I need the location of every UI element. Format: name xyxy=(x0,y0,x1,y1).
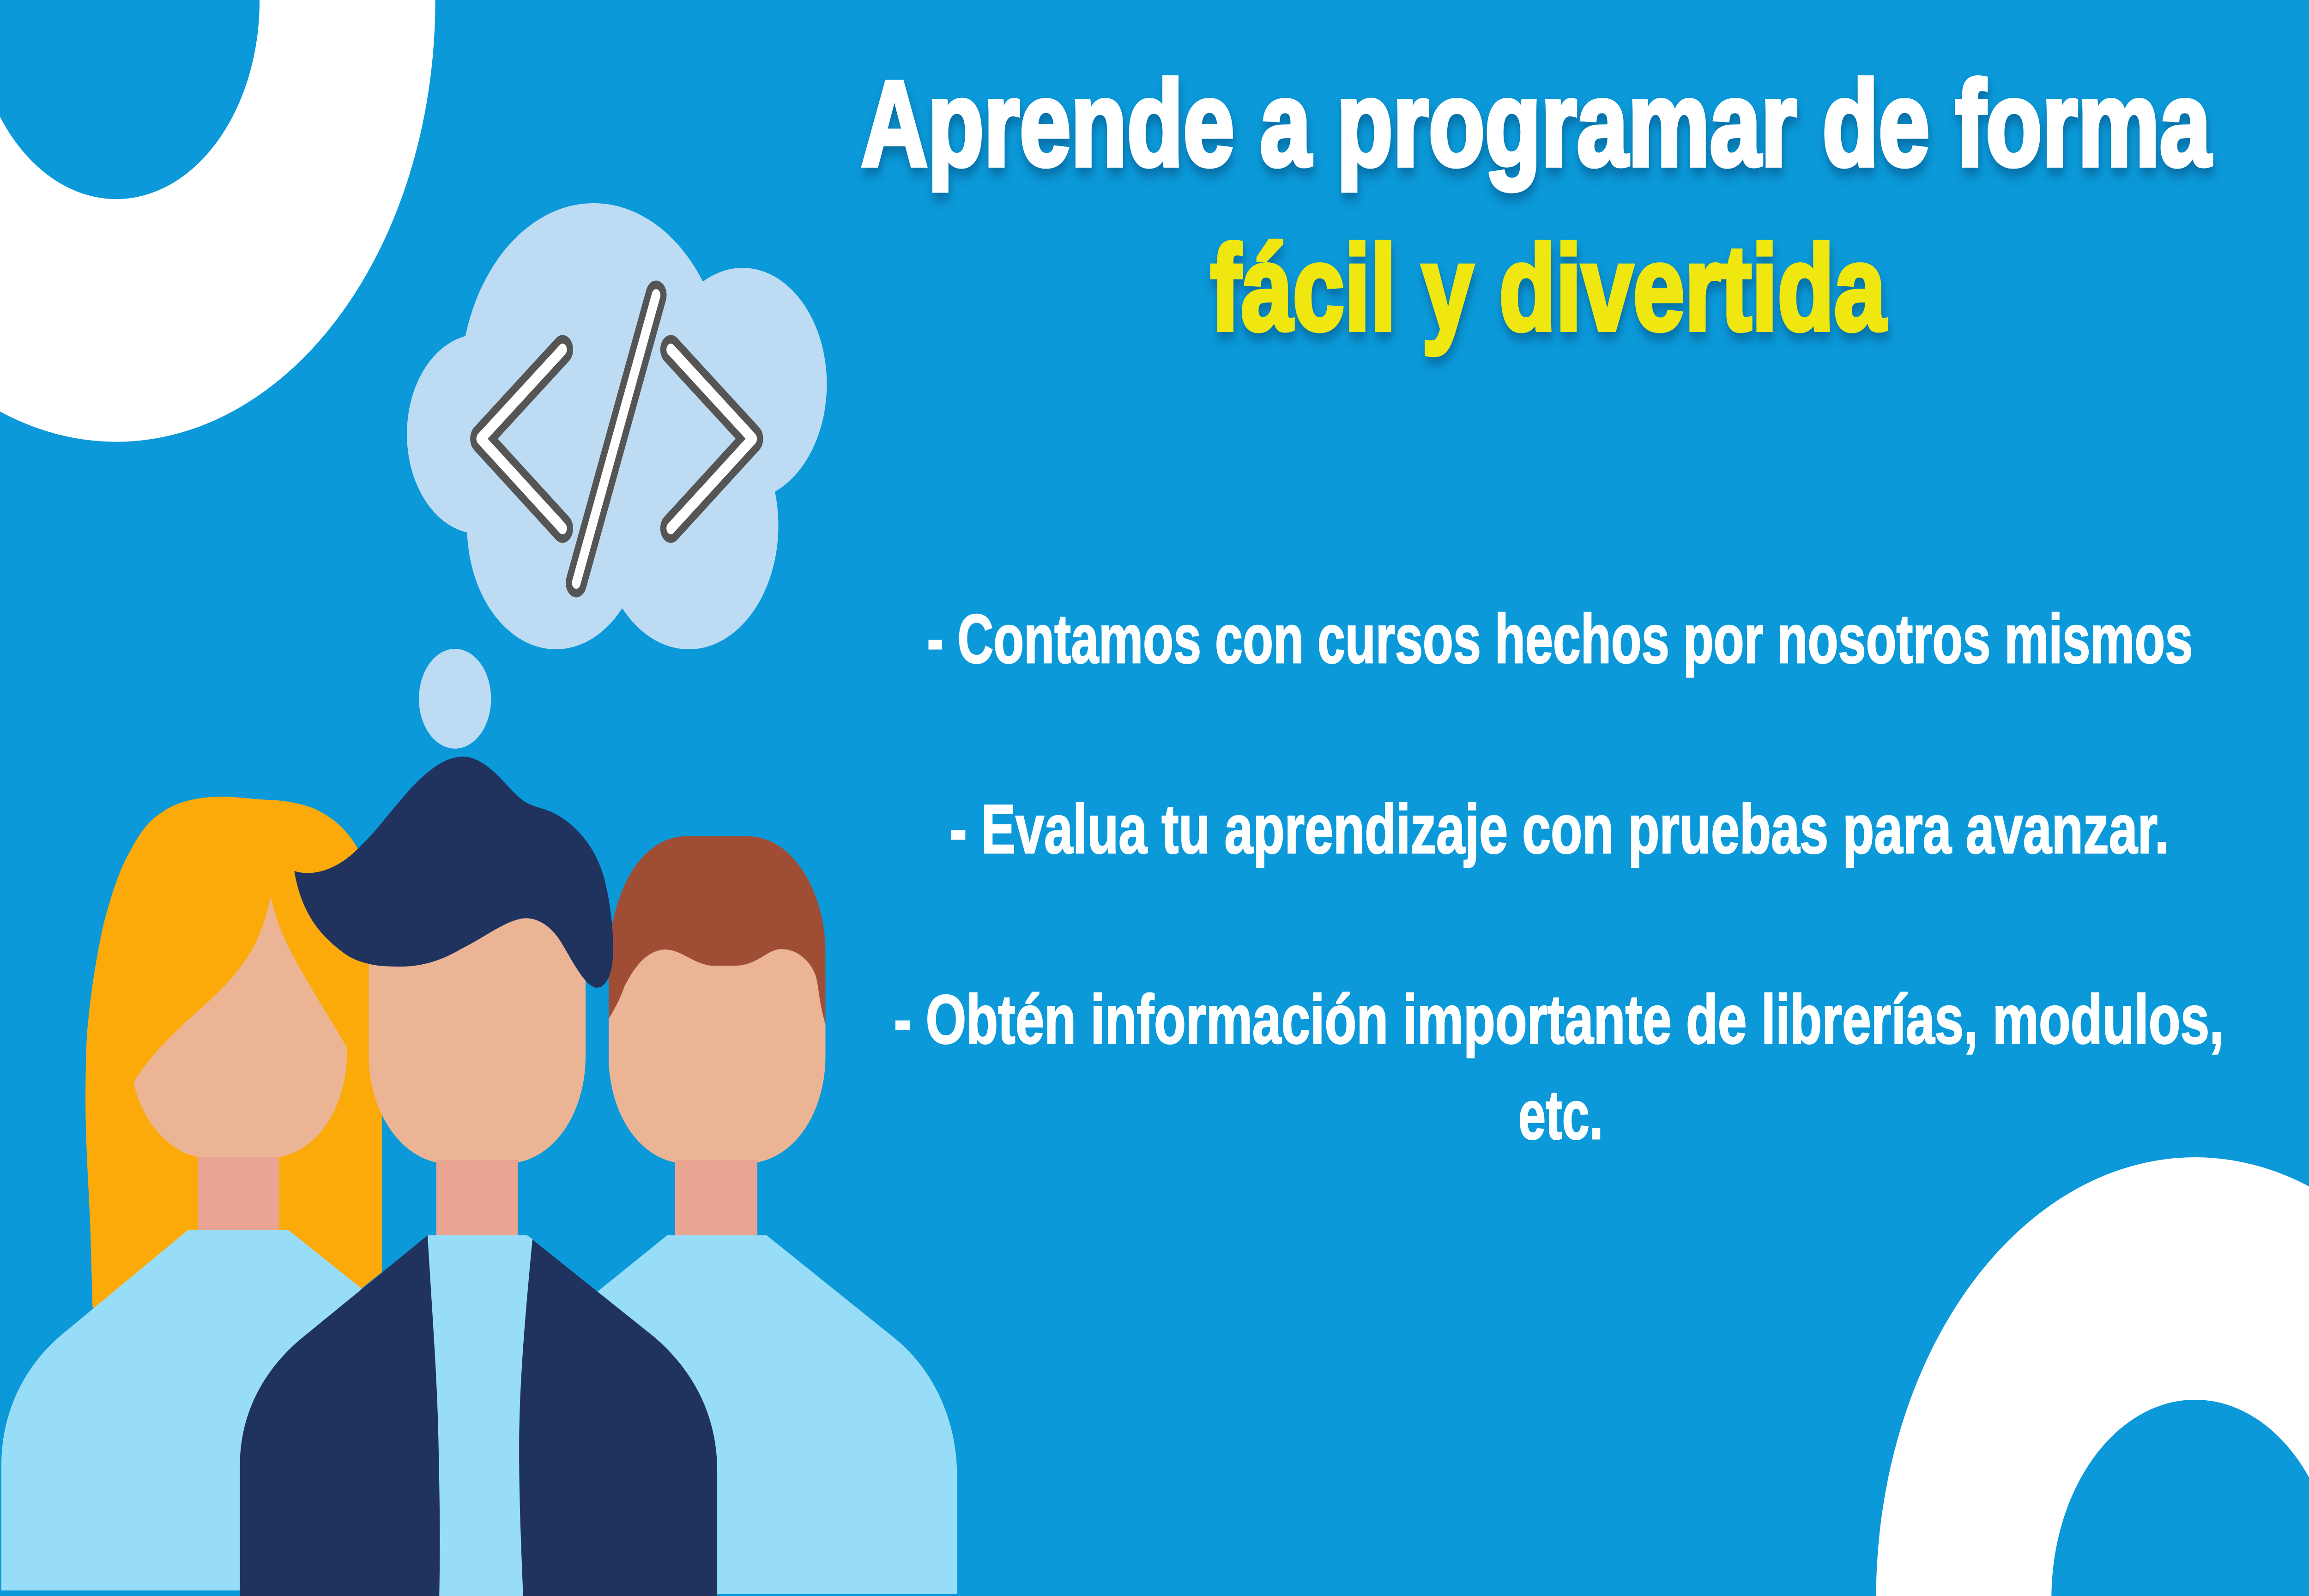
benefit 2: - Evalua tu aprendizaje con pruebas para avanzar. xyxy=(950,790,2169,868)
benefit 3 line 1: - Obtén información importante de librerías, modulos, xyxy=(894,980,2224,1058)
woman hair xyxy=(85,797,382,1339)
right man hair xyxy=(609,836,825,1024)
middle man jacket xyxy=(240,1235,717,1596)
small bubble xyxy=(419,649,491,749)
middle man face xyxy=(369,901,586,1162)
right man shirt xyxy=(501,1235,957,1594)
thought bubble xyxy=(407,203,827,749)
right man face xyxy=(609,942,825,1162)
decorative ring: bottom right xyxy=(1876,1157,2309,1596)
heading line 2: fácil y divertida xyxy=(1210,221,1886,356)
woman shirt xyxy=(1,1230,401,1590)
woman face xyxy=(133,896,347,1158)
woman neck xyxy=(198,1157,279,1233)
person: woman xyxy=(1,797,401,1590)
middle man neck xyxy=(436,1160,518,1236)
icon: code brackets xyxy=(481,295,753,583)
middle man shirt xyxy=(428,1235,532,1596)
people illustration xyxy=(1,756,957,1596)
benefit 1: - Contamos con cursos hechos por nosotros mismos xyxy=(927,600,2193,677)
heading line 1: Aprende a programar de forma xyxy=(861,56,2212,191)
middle man hair xyxy=(294,756,613,988)
benefit 3 line 2: etc. xyxy=(1518,1076,1603,1154)
right man neck xyxy=(675,1160,757,1235)
heading xyxy=(861,56,2212,356)
cloud xyxy=(407,203,827,649)
benefits list xyxy=(894,600,2224,1154)
decorative ring: top left xyxy=(0,0,435,442)
person: middle man xyxy=(240,756,717,1596)
person: right man xyxy=(501,836,957,1594)
